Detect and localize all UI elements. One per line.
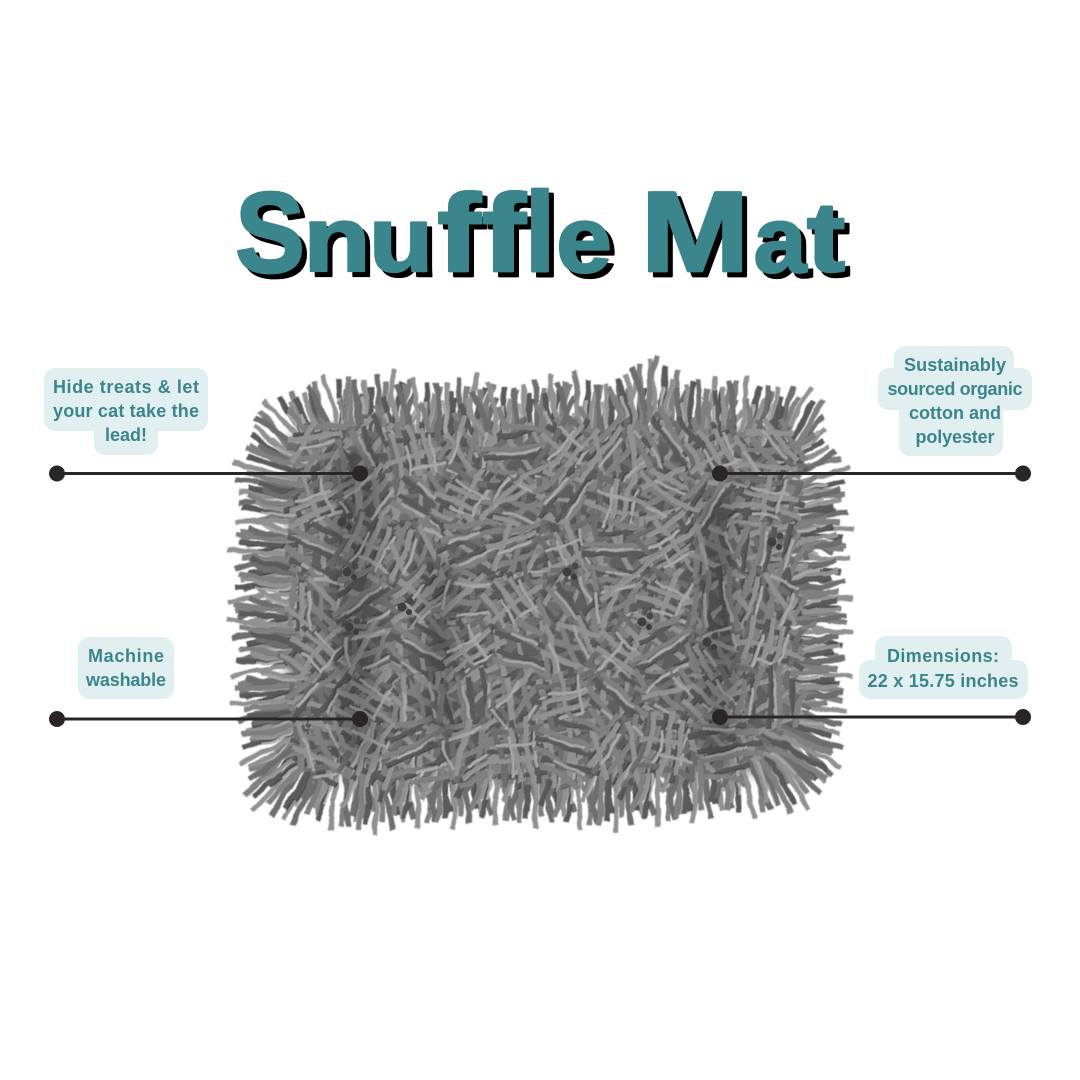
title: a — [754, 187, 808, 293]
callout: hide treats — [44, 368, 208, 455]
callout: sustainably sourced — [878, 346, 1032, 456]
callout: machine washable: Machine — [88, 646, 164, 666]
mat strands — [222, 357, 861, 844]
callout: hide treats: your cat take the — [53, 401, 199, 421]
title: f — [437, 171, 482, 295]
callout: sustainably sourced: polyester — [916, 427, 994, 447]
title: t — [807, 182, 845, 292]
callout: hide treats: Hide treats & let — [53, 377, 199, 397]
callout: sustainably sourced: sourced organic — [888, 379, 1022, 399]
title: n — [303, 188, 371, 291]
callout: dimensions: 22 x 15.75 inches — [868, 671, 1018, 691]
mat knots — [338, 512, 784, 650]
leader line: top right — [712, 466, 1031, 482]
leader line: bottom left — [49, 711, 368, 727]
callout: dimensions — [859, 636, 1028, 699]
callout: machine washable — [78, 637, 174, 699]
snuffle mat product — [222, 355, 861, 844]
title: S — [235, 170, 305, 297]
callout: hide treats: lead! — [105, 425, 147, 445]
callout: dimensions: Dimensions: — [887, 646, 999, 666]
title: f — [482, 171, 527, 295]
mat dark spines — [335, 450, 736, 760]
title: M — [641, 168, 749, 295]
title: u — [369, 188, 433, 291]
mat dark base — [290, 430, 790, 770]
title — [235, 168, 845, 297]
callout: machine washable: washable — [85, 670, 166, 690]
mat long loose strands — [345, 355, 700, 600]
title: l — [525, 169, 555, 295]
leader line: top left — [49, 466, 368, 482]
leader line: bottom right — [712, 709, 1031, 725]
title: e — [556, 187, 612, 292]
callout: sustainably sourced: cotton and — [909, 403, 1001, 423]
callout: sustainably sourced: Sustainably — [904, 355, 1006, 375]
